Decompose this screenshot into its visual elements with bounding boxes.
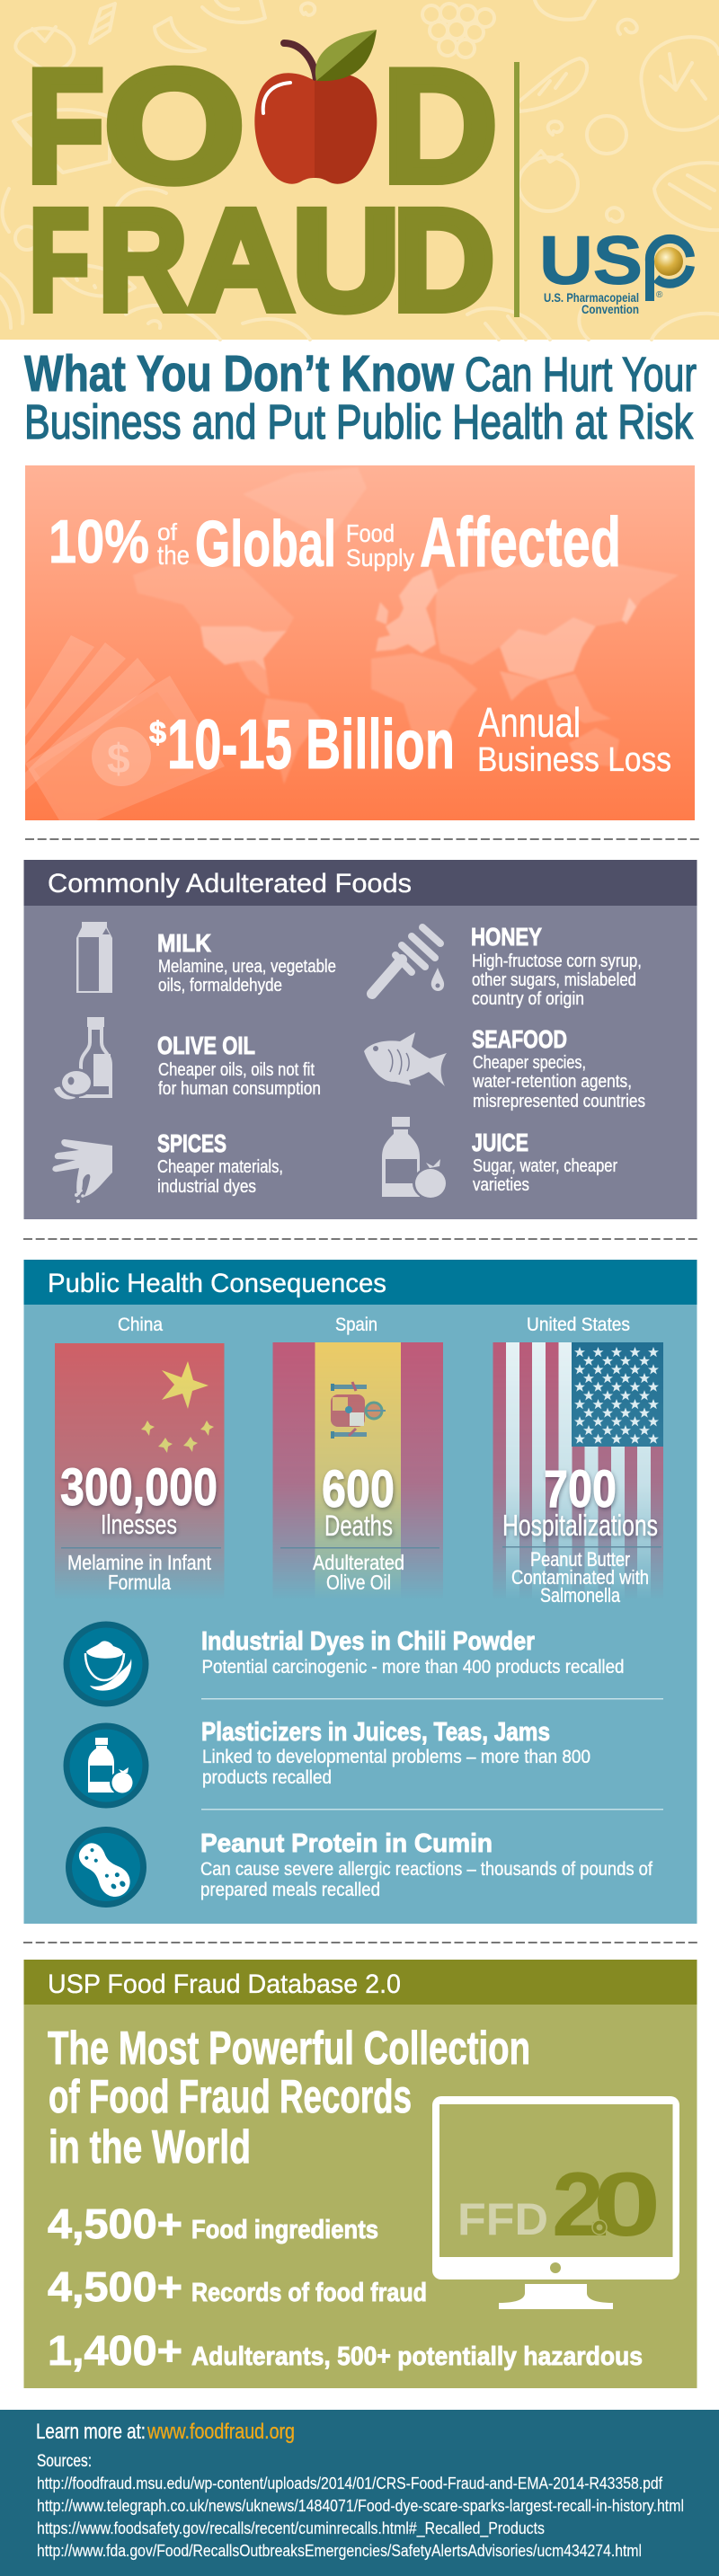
stat: spain: 600 (322, 1460, 395, 1518)
panel: public health consequences (23, 1260, 697, 1924)
tagline: in the World (49, 2121, 251, 2173)
stat: $10-15 billion annual business loss: $ (149, 716, 166, 750)
spices: industrial dyes (157, 1177, 256, 1197)
icon: banknotes: $ (107, 735, 130, 782)
stat: spain: Olive Oil (326, 1571, 391, 1594)
learn more link: www.foodfraud.org (146, 2420, 295, 2444)
panel: commonly adulterated foods (23, 860, 697, 1219)
stat: china (60, 1458, 221, 1594)
header banner (0, 0, 719, 340)
stat: spain (280, 1460, 439, 1594)
sources: https://www.foodsafety.gov/recalls/recent/cuminrecalls.html#_Recalled_Products (37, 2518, 545, 2538)
juice: JUICE (472, 1129, 528, 1156)
honey: other sugars, mislabeled (472, 970, 636, 990)
panel: global impact (25, 465, 695, 820)
honey: High-fructose corn syrup, (472, 952, 642, 971)
item: industrial dyes (201, 1627, 624, 1677)
seafood: misrepresented countries (473, 1092, 645, 1111)
icon: banknotes (25, 635, 225, 820)
stat: adulterants (48, 2327, 643, 2374)
honey: HONEY (471, 923, 542, 951)
stat: 10% of the global food supply affected: Food (346, 519, 395, 547)
stat: $10-15 billion annual business loss: Annual (478, 699, 581, 746)
honey: country of origin (472, 989, 584, 1009)
stat: china: Ilnesses (101, 1509, 177, 1540)
icon: spices hand (52, 1139, 112, 1203)
juice (472, 1129, 617, 1195)
stat: china: 300,000 (60, 1458, 217, 1517)
stat: records of food fraud (48, 2263, 427, 2310)
icon: FFD 2.0 monitor: . (587, 2155, 612, 2255)
stat: united states (502, 1460, 661, 1607)
item: peanut protein: Can cause severe allergic reactions – thousands of pounds of (200, 1859, 652, 1880)
sources (37, 2452, 684, 2560)
icon: peanut (66, 1827, 146, 1908)
item: peanut protein: prepared meals recalled (200, 1880, 380, 1900)
title: FRAUD: D (393, 180, 494, 340)
USP logo: U.S. Pharmacopeial (544, 290, 639, 305)
stat: 10% of the global food supply affected: Supply (346, 544, 414, 571)
stat: $10-15 billion annual business loss: Business Loss (477, 741, 671, 779)
item: plasticizers: products recalled (202, 1767, 332, 1788)
icon: juice bottle (63, 1723, 149, 1808)
stat: adulterants: 1,400+ (48, 2327, 182, 2374)
title: FOOD (27, 36, 498, 216)
icon: fish (364, 1032, 447, 1086)
olive oil (157, 1031, 321, 1099)
seafood: Cheaper species, (473, 1053, 586, 1073)
stat: 10% of the global food supply affected: 10% (49, 508, 149, 576)
icon: olive oil bottle (54, 1017, 111, 1100)
stat: spain: Deaths (324, 1509, 393, 1542)
background food doodles (0, 0, 719, 340)
title: FRAUD: A (187, 180, 295, 340)
item: industrial dyes: Industrial Dyes in Chili Powder (201, 1627, 535, 1656)
item: peanut protein (200, 1829, 652, 1900)
flag: spain (273, 1342, 443, 1598)
item: plasticizers: Plasticizers in Juices, Teas, Jams (201, 1718, 550, 1747)
stat: adulterants: Adulterants, 500+ potentially hazardous (191, 2342, 643, 2371)
footer (0, 2410, 719, 2576)
milk (157, 929, 336, 996)
country labels: United States (527, 1315, 630, 1335)
emblem (331, 1382, 386, 1438)
icon: FFD 2.0 monitor: 0 (593, 2155, 661, 2255)
item: plasticizers: Linked to developmental problems – more than 800 (202, 1747, 590, 1767)
olive oil: for human consumption (158, 1079, 321, 1099)
icon: chili powder bowl (63, 1621, 149, 1707)
subtitle heading: What You Don’t Know (24, 345, 455, 403)
stat: china: Melamine in Infant (67, 1551, 212, 1574)
world map (25, 467, 679, 820)
title: FRAUD: U (292, 180, 400, 340)
subtitle heading (24, 345, 697, 449)
stat: china: Formula (108, 1571, 171, 1594)
heading: Public Health Consequences (48, 1269, 386, 1298)
tagline (48, 2023, 530, 2173)
stat: $10-15 billion annual business loss: 10-15 Billion (167, 704, 455, 783)
icon: milk carton (76, 922, 112, 993)
olive oil: OLIVE OIL (157, 1031, 255, 1059)
flag: united states (493, 1342, 663, 1599)
country labels: China (118, 1315, 163, 1335)
stat: united states: Peanut Butter (530, 1548, 630, 1571)
item: plasticizers (201, 1718, 590, 1788)
title: FOOD: O (104, 36, 245, 216)
stat: 10% of the global food supply affected: of (157, 518, 178, 545)
stat: united states: Salmonella (540, 1584, 621, 1607)
USP logo: US (539, 223, 643, 299)
icon: FFD 2.0 monitor: FFD (457, 2194, 548, 2244)
spices: SPICES (157, 1129, 226, 1157)
milk: Melamine, urea, vegetable (158, 957, 336, 977)
icon: juice bottle and apple (382, 1117, 448, 1199)
milk: oils, formaldehyde (158, 976, 282, 996)
icon: apple (254, 30, 377, 184)
icon: FFD 2.0 monitor: 2 (552, 2155, 604, 2255)
USP logo: Convention (581, 302, 639, 316)
learn more link (36, 2420, 295, 2444)
USP logo: ® (656, 290, 663, 300)
seafood: SEAFOOD (472, 1025, 567, 1053)
country labels: Spain (335, 1315, 377, 1335)
title: FRAUD: R (99, 180, 187, 340)
stat: records of food fraud: Records of food fraud (191, 2279, 427, 2307)
heading: Commonly Adulterated Foods (48, 869, 412, 899)
stat: united states: 700 (544, 1460, 617, 1518)
country labels (118, 1315, 630, 1335)
tagline: The Most Powerful Collection (48, 2023, 530, 2075)
stat: 10% of the global food supply affected (49, 502, 621, 581)
title: FOOD: F (27, 36, 104, 216)
title: FRAUD: F (29, 180, 90, 340)
stat: united states: Contaminated with (511, 1566, 649, 1589)
USP logo (539, 223, 690, 316)
milk: MILK (157, 929, 211, 957)
item: industrial dyes: Potential carcinogenic - more than 400 products recalled (201, 1657, 624, 1677)
seafood: water-retention agents, (472, 1072, 632, 1092)
stat: records of food fraud: 4,500+ (48, 2263, 182, 2310)
stat: 10% of the global food supply affected: Global (195, 509, 336, 580)
stat: united states: Hospitalizations (502, 1509, 658, 1542)
flag: china (55, 1343, 225, 1599)
learn more link: Learn more at: (36, 2420, 146, 2444)
stars (574, 1347, 659, 1444)
stat: 10% of the global food supply affected: Affected (420, 502, 621, 581)
stat: food ingredients: Food ingredients (191, 2216, 378, 2244)
title: FOOD: D (383, 36, 498, 216)
stat: food ingredients: 4,500+ (48, 2200, 182, 2247)
juice: varieties (473, 1175, 529, 1195)
title: FRAUD (29, 180, 494, 340)
stat: 10% of the global food supply affected: the (157, 541, 190, 571)
icon: FFD 2.0 monitor (432, 2096, 679, 2309)
vertical divider (514, 62, 519, 317)
heading: USP Food Fraud Database 2.0 (48, 1970, 401, 1999)
sources: Sources: (37, 2452, 92, 2471)
panel: USP food fraud database (23, 1960, 697, 2388)
stat: food ingredients (48, 2200, 378, 2247)
spices (157, 1129, 283, 1197)
stat: spain: Adulterated (313, 1551, 404, 1574)
juice: Sugar, water, cheaper (473, 1156, 617, 1176)
spices: Cheaper materials, (157, 1157, 283, 1177)
item: peanut protein: Peanut Protein in Cumin (200, 1829, 493, 1858)
tagline: of Food Fraud Records (49, 2071, 412, 2123)
seafood (472, 1025, 645, 1111)
olive oil: Cheaper oils, oils not fit (158, 1060, 315, 1080)
icon: honey dipper (372, 927, 444, 994)
honey (471, 923, 642, 1009)
